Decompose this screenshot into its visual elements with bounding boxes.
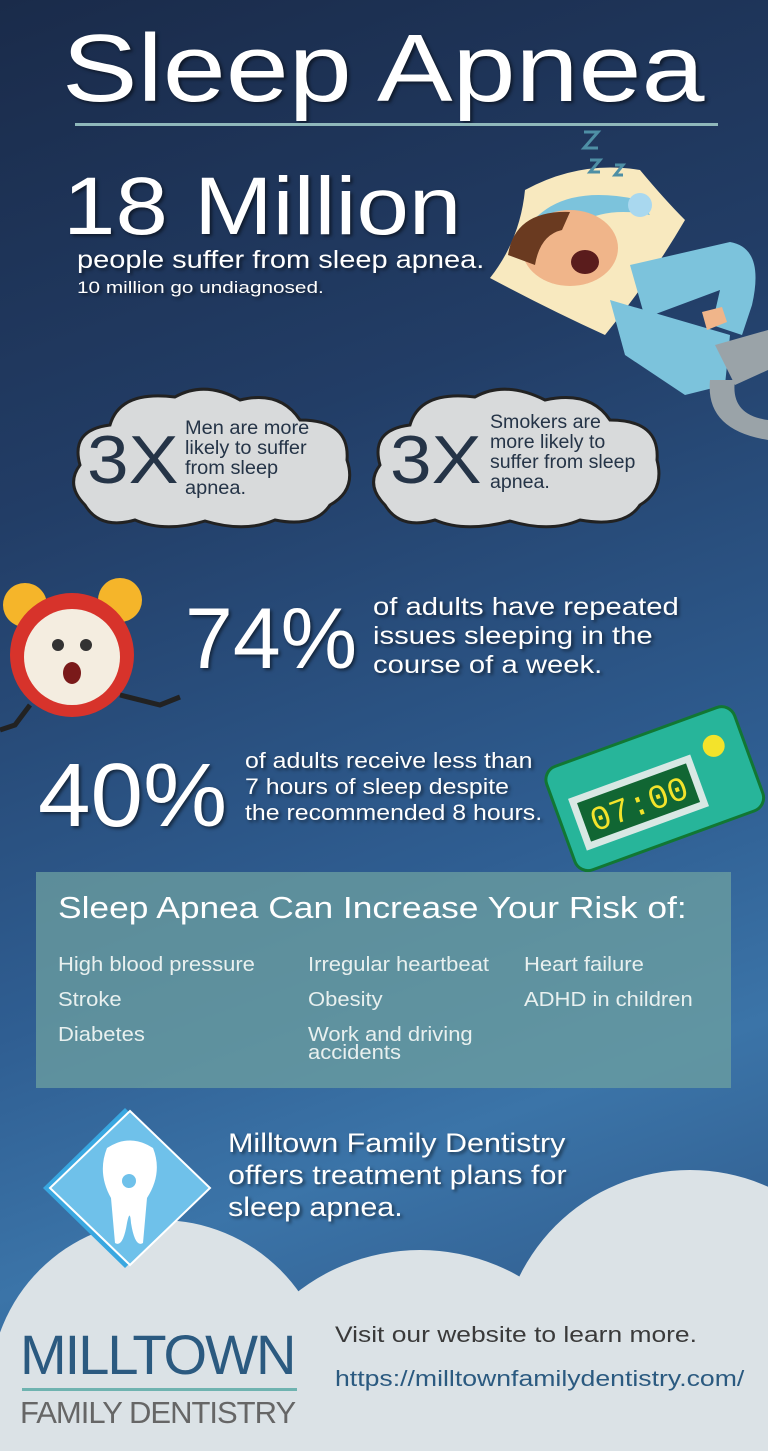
text: website (335, 1322, 744, 1391)
panel: risks: Stroke (58, 989, 122, 1011)
panel: risks (36, 872, 731, 1088)
stat: 40%: 7 hours of sleep despite (245, 774, 509, 799)
icon: tooth diamond (43, 1108, 212, 1268)
text: treatment: offers treatment plans for (228, 1160, 567, 1190)
cloud: smokers: suffer from sleep (490, 452, 635, 473)
text: treatment: Milltown Family Dentistry (228, 1128, 565, 1158)
stat: 18 million (63, 161, 485, 300)
cloud: smokers (372, 388, 660, 528)
icon: digital clock (544, 705, 766, 872)
panel: risks: Irregular heartbeat (308, 954, 489, 976)
stat: 40% (38, 746, 544, 846)
stat: 74%: course of a week. (373, 651, 602, 679)
cloud: men: from sleep (185, 458, 278, 479)
text: website: https://milltownfamilydentistry.com/ (335, 1366, 744, 1391)
stat: 40%: the recommended 8 hours. (245, 800, 542, 825)
title: Sleep Apnea (62, 15, 705, 122)
bottom clouds (0, 1170, 768, 1451)
panel: risks: Obesity (308, 989, 383, 1011)
stat: 74%: of adults have repeated (373, 593, 679, 621)
stat: 18 million: people suffer from sleep apnea. (77, 246, 484, 274)
cloud: smokers: Smokers are (490, 412, 601, 433)
stat: 40%: 40% (38, 746, 227, 846)
stat: 74%: issues sleeping in the (373, 622, 653, 650)
stat: 18 million: 18 Million (63, 161, 461, 252)
text: website: Visit our website to learn more. (335, 1322, 697, 1347)
panel: risks: Diabetes (58, 1024, 145, 1046)
cloud: men: likely to suffer (185, 438, 307, 459)
panel: risks: ADHD in children (524, 989, 693, 1011)
text: treatment: sleep apnea. (228, 1192, 403, 1222)
cloud: men: Men are more (185, 418, 309, 439)
panel: risks: High blood pressure (58, 954, 255, 976)
panel: risks: Heart failure (524, 954, 644, 976)
logo (20, 1323, 297, 1430)
icon: digital clock: 07:00 (586, 771, 695, 842)
stat: 74% (185, 591, 681, 687)
cloud: smokers: apnea. (490, 472, 550, 493)
stat: 40%: of adults receive less than (245, 748, 532, 773)
cloud: men (72, 388, 352, 528)
cloud: men: apnea. (185, 478, 246, 499)
icon: alarm clock (0, 578, 181, 732)
cloud: smokers: 3X (390, 422, 482, 498)
panel: risks: Work and driving (308, 1024, 473, 1046)
panel: risks: accidents (308, 1042, 401, 1064)
text: treatment (228, 1128, 570, 1225)
stat: 18 million: 10 million go undiagnosed. (77, 278, 324, 297)
logo: MILLTOWN (20, 1323, 294, 1386)
logo: FAMILY DENTISTRY (20, 1395, 295, 1430)
cloud: men: 3X (87, 422, 179, 498)
cloud: smokers: more likely to (490, 432, 605, 453)
stat: 74%: 74% (185, 591, 357, 687)
illustration: sleeping man (490, 130, 768, 440)
panel: risks: Sleep Apnea Can Increase Your Risk of: (58, 890, 687, 925)
